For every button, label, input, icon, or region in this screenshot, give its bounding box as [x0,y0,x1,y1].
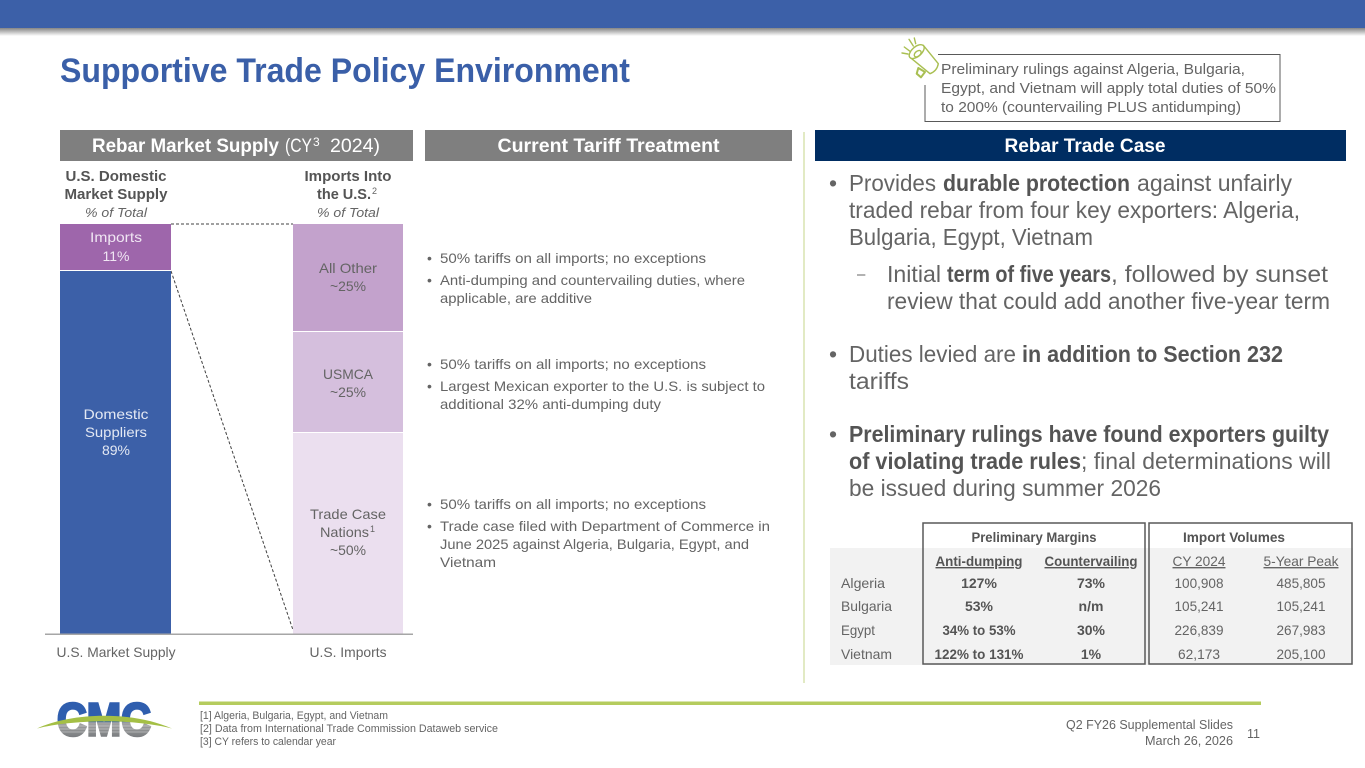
bar: US imports: Trade Case [310,506,386,522]
panel header: rebar trade case [815,130,1346,161]
table headers [936,530,1339,569]
row: Bulgaria: Bulgaria [841,598,892,614]
bar: US imports [293,224,403,634]
panel header: rebar market supply: Rebar Market Supply [92,135,279,157]
bar: US market supply: Imports [90,229,142,245]
footnotes: [1] Algeria, Bulgaria, Egypt, and Vietnam [200,710,388,722]
row: Bulgaria: 53% [965,598,994,614]
row: Vietnam: 122% to 131% [934,646,1024,662]
footnotes: [3] CY refers to calendar year [200,736,336,748]
panel header: rebar market supply: 3 [313,135,320,149]
chart heading: domestic market supply: % of Total [85,205,148,220]
row: Algeria: Algeria [841,575,885,591]
tariff text: trade case nations: 50% tariffs on all imports; no exceptions [440,496,706,512]
trade case bullets: Preliminary rulings have found exporters guilty [849,421,1329,447]
footnotes [200,710,498,748]
trade case bullets: Initial [887,261,941,287]
tariff text: USMCA: Largest Mexican exporter to the U.S. is subject to [440,378,765,394]
footnotes: [2] Data from International Trade Commission Dataweb service [200,723,498,735]
panel header: current tariff treatment: Current Tariff Treatment [498,135,720,157]
panel header: rebar market supply: (CY [285,135,312,157]
bar: US imports: 1 [370,524,375,534]
callout: Preliminary rulings against Algeria, Bulgaria, [941,62,1245,78]
table headers: Countervailing [1044,553,1138,569]
tariff text: USMCA: additional 32% anti-dumping duty [440,396,661,412]
tariff text: USMCA [427,356,765,412]
stacked bar chart [45,224,413,660]
trade case bullets: – [857,266,866,283]
row: Egypt: Egypt [841,622,875,638]
trade case bullets: durable protection [943,170,1130,196]
data table [830,523,1353,665]
row: Bulgaria: 105,241 [1276,598,1326,614]
tariff text: all other: • [427,250,432,266]
table headers: CY 2024 [1172,553,1226,569]
trade case bullets: ; final determinations will [1081,448,1331,474]
tariff text: all other [427,250,745,306]
row: Vietnam: 62,173 [1178,646,1220,662]
trade case bullets [829,170,1331,501]
chart heading: imports into the US [304,169,392,220]
tariff text: trade case nations: • [427,518,432,534]
trade case bullets: against unfairly [1137,170,1292,196]
trade case bullets: in addition to Section 232 [1022,341,1283,367]
trade case bullets: • [829,421,837,447]
callout: to 200% (countervailing PLUS antidumping) [941,100,1241,116]
table headers: 5-Year Peak [1264,553,1339,569]
top banner [0,0,1365,36]
bar: US imports: Nations [320,524,369,540]
bar: US market supply: Domestic [84,406,148,422]
footer info [1066,718,1260,748]
panel header: rebar market supply [60,130,413,161]
row: Egypt: 34% to 53% [942,622,1016,638]
chart heading: domestic market supply: U.S. Domestic [66,169,166,185]
tariff text: USMCA: • [427,356,432,372]
tariff text: trade case nations: June 2025 against Algeria, Bulgaria, Egypt, and [440,536,749,552]
tariff text: trade case nations: Vietnam [440,554,496,570]
tariff text: trade case nations: • [427,496,432,512]
trade case bullets: Duties levied are [849,341,1016,367]
trade case bullets: • [829,170,837,196]
row: Algeria: 485,805 [1276,575,1326,591]
row: Egypt [841,622,1326,638]
trade case bullets: traded rebar from four key exporters: Algeria, [849,197,1300,223]
trade case bullets: • [829,341,837,367]
bar: US imports: ~25% [330,384,366,400]
row: Vietnam [841,646,1326,662]
row: Bulgaria: 105,241 [1174,598,1224,614]
row: Algeria: 100,908 [1174,575,1224,591]
tariff text: all other: • [427,272,432,288]
trade case bullets: Bulgaria, Egypt, Vietnam [849,224,1093,250]
row: Algeria: 73% [1077,575,1106,591]
row: Vietnam: Vietnam [841,646,892,662]
table headers: Import Volumes [1183,530,1285,545]
tariff text: USMCA: • [427,378,432,394]
footer info: 11 [1247,727,1260,741]
row: Algeria: 127% [961,575,997,591]
bar: US market supply [60,224,171,634]
callout [902,38,1280,122]
row: Bulgaria: n/m [1079,598,1103,614]
panel header: current tariff treatment [425,130,792,161]
bar: US market supply: 89% [102,442,130,458]
panel header: rebar market supply: 2024) [330,135,380,157]
trade case bullets: Provides [849,170,936,196]
tariff text: all other: applicable, are additive [440,290,592,306]
trade case bullets: of violating trade rules [849,448,1081,474]
row: Bulgaria [841,598,1326,614]
trade case bullets: review that could add another five-year term [887,288,1330,314]
bar: US market supply: Suppliers [85,424,147,440]
row: Egypt: 226,839 [1174,622,1224,638]
tariff text: USMCA: 50% tariffs on all imports; no exceptions [440,356,706,372]
chart heading: domestic market supply: Market Supply [64,187,168,203]
table headers: Preliminary Margins [972,530,1096,545]
title: Supportive Trade Policy Environment [60,52,630,90]
trade case bullets: tariffs [849,368,909,394]
bar: US imports: USMCA [323,366,374,382]
footer info: March 26, 2026 [1145,734,1233,748]
tariff text: all other: 50% tariffs on all imports; no exceptions [440,250,706,266]
row: Egypt: 267,983 [1276,622,1326,638]
row: Egypt: 30% [1077,622,1106,638]
chart heading: imports into the US: 2 [372,186,377,196]
footer info: Q2 FY26 Supplemental Slides [1066,718,1233,732]
tariff text: trade case nations [427,496,770,570]
callout: Egypt, and Vietnam will apply total duties of 50% [941,81,1276,97]
bar: US imports: ~50% [330,542,366,558]
bar: US market supply: 11% [102,248,130,264]
chart heading: imports into the US: Imports Into [304,169,392,185]
row: Vietnam: 1% [1081,646,1102,662]
stacked bar chart: U.S. Market Supply [56,644,176,660]
tariff text: all other: Anti-dumping and countervailing duties, where [440,272,745,288]
chart heading: imports into the US: % of Total [317,205,380,220]
table headers: Anti-dumping [936,553,1022,569]
logo: CMC: CMC [57,694,151,746]
trade case bullets: term of five years [947,261,1111,287]
chart heading: imports into the US: the U.S. [317,187,371,203]
chart heading: domestic market supply [64,169,168,220]
row: Algeria [841,575,1326,591]
trade case bullets: , followed by sunset [1111,261,1329,287]
row: Vietnam: 205,100 [1276,646,1326,662]
tariff text: trade case nations: Trade case filed with Department of Commerce in [440,518,770,534]
bar: US imports: All Other [319,260,377,276]
stacked bar chart: U.S. Imports [310,644,386,660]
bar: US imports: ~25% [330,278,366,294]
icon: megaphone [902,38,938,77]
panel header: rebar trade case: Rebar Trade Case [1004,135,1166,157]
trade case bullets: be issued during summer 2026 [849,475,1161,501]
